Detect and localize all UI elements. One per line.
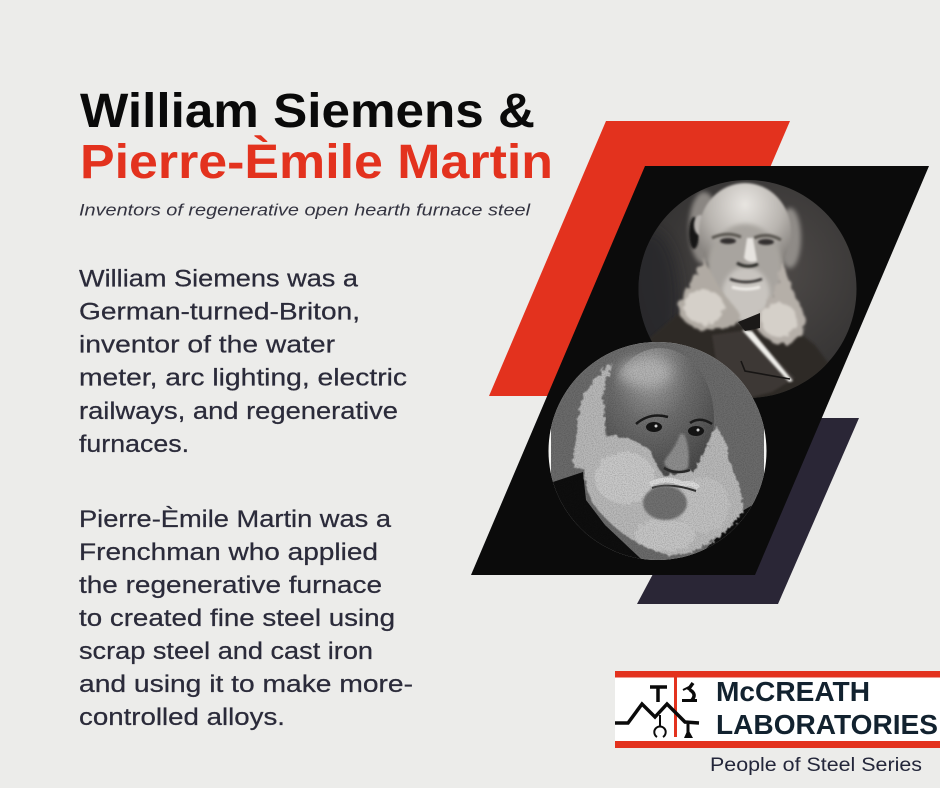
text block: William Siemens: German-turned-Briton, bbox=[79, 298, 360, 326]
eyes and nose bbox=[712, 234, 781, 289]
beard bbox=[679, 258, 806, 344]
logo icon bbox=[615, 683, 699, 737]
text block: William Siemens: William Siemens was a bbox=[79, 266, 359, 292]
text block: Pierre-Èmile Martin: Pierre-Èmile Martin was a bbox=[79, 506, 392, 533]
text block: Pierre-Èmile Martin: scrap steel and cast iron bbox=[79, 638, 373, 665]
text block: William Siemens: meter, arc lighting, electric bbox=[79, 364, 407, 392]
black parallelogram bbox=[471, 166, 929, 575]
jacket bbox=[670, 315, 828, 398]
face bbox=[698, 182, 791, 262]
portrait: Pierre-Èmile Martin bbox=[545, 342, 770, 565]
beard bbox=[585, 425, 743, 556]
face details bbox=[636, 416, 712, 520]
title bbox=[80, 85, 553, 189]
text block: Pierre-Èmile Martin: controlled alloys. bbox=[79, 704, 285, 731]
side hair bbox=[573, 362, 612, 470]
title: William Siemens & bbox=[80, 85, 535, 138]
title: Pierre-Èmile Martin bbox=[80, 135, 553, 189]
text block: Pierre-Èmile Martin: the regenerative furnace bbox=[79, 572, 382, 599]
white edge slivers bbox=[548, 342, 766, 560]
red parallelogram bbox=[489, 121, 790, 396]
text block: William Siemens: furnaces. bbox=[79, 431, 189, 458]
bow tie bbox=[738, 313, 760, 331]
logo wordmark: McCREATH bbox=[716, 676, 870, 707]
series caption: People of Steel Series bbox=[710, 755, 922, 776]
head bbox=[606, 348, 714, 488]
logo wordmark bbox=[716, 676, 938, 740]
text block: Pierre-Èmile Martin bbox=[79, 506, 413, 731]
text block: Pierre-Èmile Martin: to created fine steel using bbox=[79, 605, 395, 632]
portrait: William Siemens bbox=[620, 180, 858, 400]
dark navy parallelogram bbox=[637, 418, 859, 604]
text block: William Siemens: inventor of the water bbox=[79, 332, 335, 358]
text block: William Siemens bbox=[79, 266, 407, 458]
logo background bbox=[615, 671, 940, 748]
text block: Pierre-Èmile Martin: and using it to make more- bbox=[79, 671, 413, 698]
subtitle: Inventors of regenerative open hearth furnace steel bbox=[79, 202, 532, 220]
logo wordmark: LABORATORIES bbox=[716, 709, 938, 740]
text block: Pierre-Èmile Martin: Frenchman who applied bbox=[79, 539, 378, 566]
logo: McCreath Laboratories bbox=[615, 671, 940, 748]
hair bbox=[689, 192, 719, 264]
jacket bbox=[553, 472, 642, 559]
film grain bbox=[548, 342, 768, 561]
text block: William Siemens: railways, and regenerative bbox=[79, 398, 398, 425]
